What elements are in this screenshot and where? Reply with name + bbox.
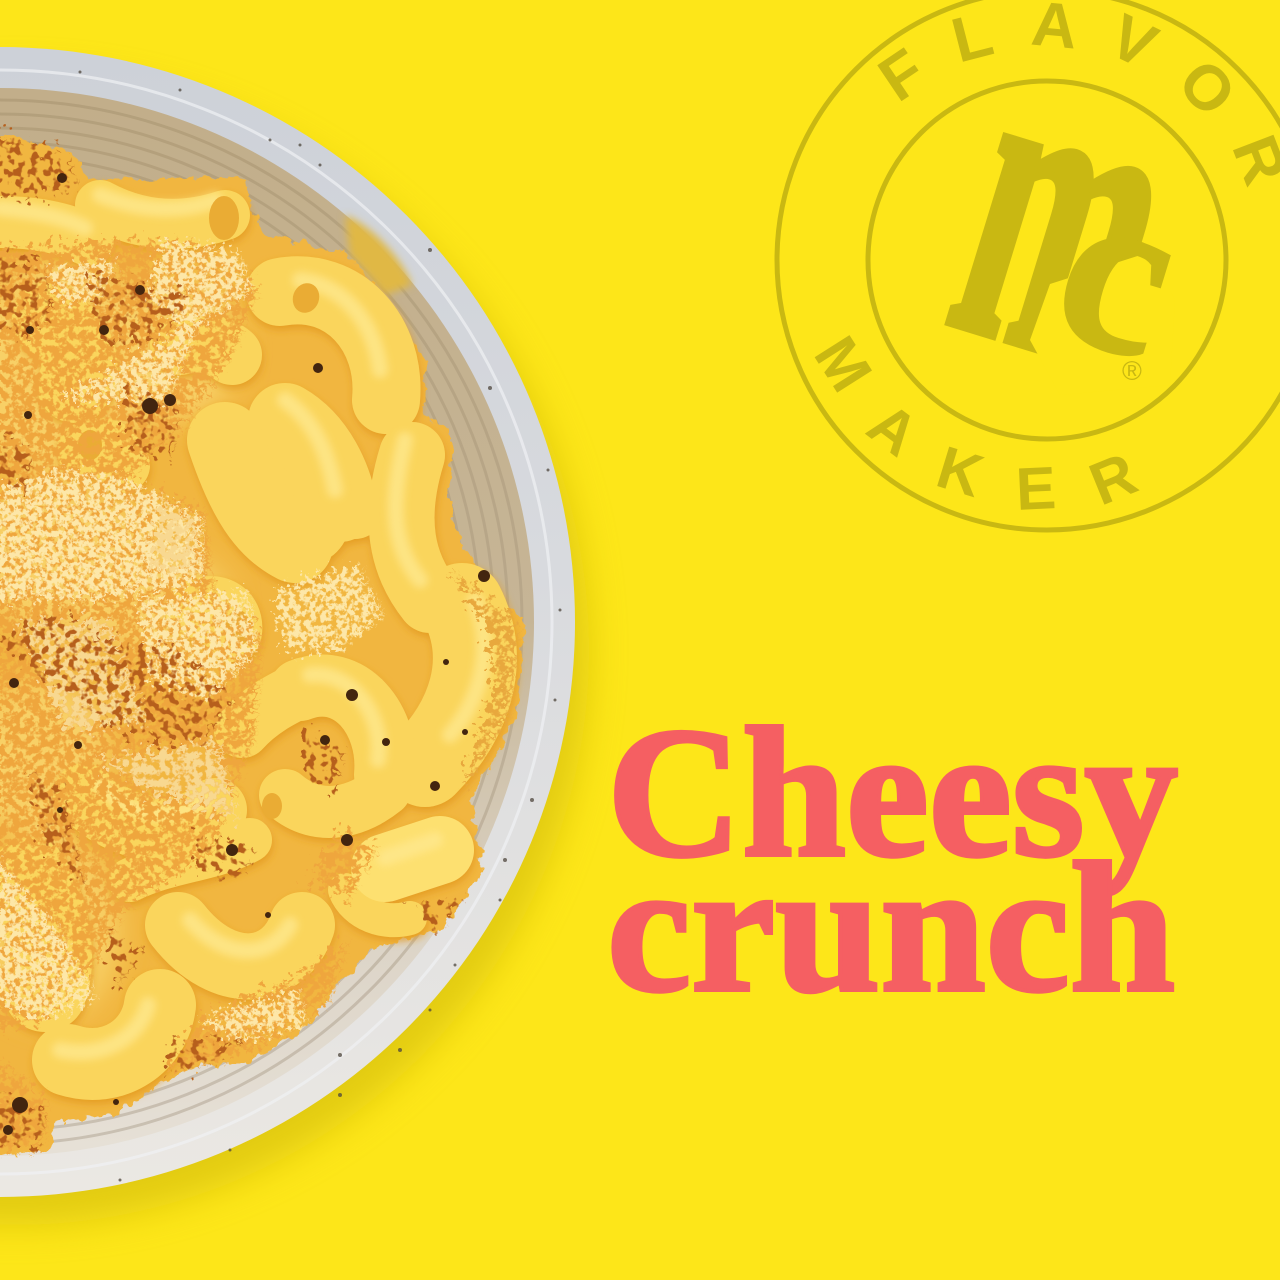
Mc monogram: ® [1122, 356, 1142, 386]
headline [607, 690, 1178, 1031]
rim highlight [0, 70, 552, 1174]
cheese smear on bowl [345, 215, 412, 295]
logo badge [774, 0, 1280, 532]
headline line 1: Cheesy [607, 690, 1178, 896]
crumb layer: golden [0, 240, 380, 1150]
crumb edge on right macaroni [450, 570, 522, 790]
cheese underlay [0, 260, 240, 1020]
dark herb specks [3, 173, 490, 1135]
Mc monogram: c [1031, 130, 1207, 409]
headline line 2: crunch [607, 825, 1175, 1031]
macaroni highlights [0, 195, 484, 1052]
speckles on rim [78, 70, 562, 1182]
macaroni pieces [0, 205, 475, 1064]
inner ring [868, 81, 1226, 439]
bowl shadow [0, 75, 589, 1225]
bowl interior [0, 88, 534, 1156]
bowl rim [0, 47, 575, 1197]
badge text: MAKER: MAKER [814, 335, 1140, 510]
macaroni openings [78, 196, 323, 819]
crumb layer: toasted [0, 135, 470, 1148]
bowl of macaroni and cheese [0, 47, 575, 1197]
food base [0, 140, 520, 1150]
outer ring [777, 0, 1280, 530]
crumb layer: pale [0, 240, 385, 1040]
